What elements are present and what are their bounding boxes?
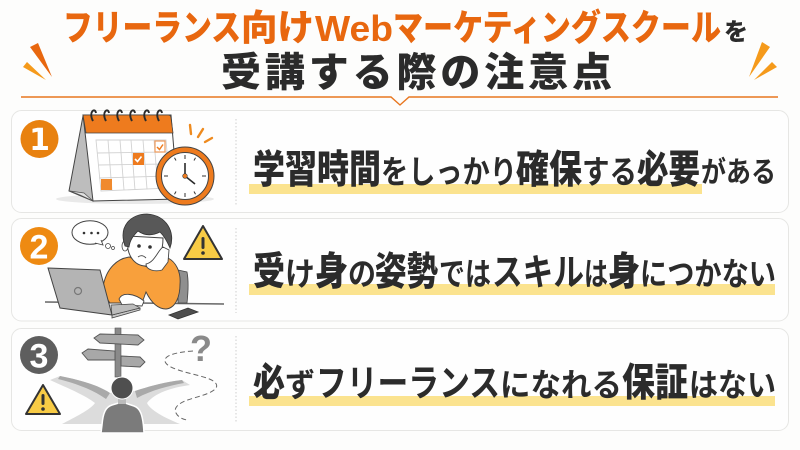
headline: point 2: 身 — [315, 241, 348, 297]
icon: signpost — [82, 328, 145, 377]
illustration: person at laptop — [45, 214, 224, 309]
headline: point 3: になれる — [500, 360, 622, 406]
headline: point 3: 必 — [253, 352, 285, 408]
headline: point 3: ず — [285, 360, 315, 406]
panel: point 1 — [12, 110, 788, 212]
headline: point 1: をしっかり — [381, 147, 517, 193]
highlight 1 — [249, 184, 702, 194]
headline: point 2: は — [584, 249, 608, 295]
icon: question mark and dashed path: ? — [190, 328, 212, 369]
icon: left burst — [23, 43, 52, 80]
panel: point 2 — [12, 214, 788, 321]
highlight 3 — [249, 396, 775, 406]
header rule with notch — [21, 97, 778, 105]
title: マーケティングスクール — [393, 0, 721, 51]
headline: point 1 — [253, 139, 776, 195]
subtitle: 受講する際の注意点 — [221, 40, 612, 98]
number badge 3 — [20, 336, 58, 376]
title: 向け — [241, 0, 314, 51]
headline: point 2: では — [439, 249, 491, 295]
illustration: person from behind — [101, 377, 144, 433]
headline: point 2: 身 — [608, 241, 640, 297]
headline: point 3 — [253, 352, 776, 408]
headline: point 2: け — [285, 249, 315, 295]
number badge 1 — [20, 120, 58, 158]
icon: speech bubble — [72, 221, 114, 250]
headline: point 3: はない — [689, 360, 776, 406]
headline: point 1: 学習時間 — [253, 139, 381, 195]
number badge 1: 1 — [29, 123, 50, 158]
headline: point 1: がある — [701, 149, 776, 191]
icon: right burst — [749, 42, 777, 80]
icon: warning — [184, 226, 222, 259]
headline: point 3: 保証 — [622, 352, 688, 408]
title: を — [724, 12, 748, 47]
headline: point 2: につかない — [640, 249, 776, 295]
number badge 2: 2 — [30, 228, 48, 266]
icon: calendar — [56, 110, 214, 204]
icon: warning — [26, 385, 60, 414]
title — [63, 0, 748, 51]
headline: point 1: 確保 — [516, 139, 582, 195]
number badge 2 — [20, 227, 58, 266]
headline: point 2: スキル — [492, 242, 584, 296]
icon: phone — [169, 308, 198, 319]
highlight 2 — [249, 284, 775, 295]
headline: point 3: フリーランス — [316, 353, 500, 407]
icon: laptop — [48, 268, 140, 318]
icon: question mark and dashed path — [165, 328, 217, 420]
headline: point 2: 受 — [253, 241, 285, 297]
headline: point 2: 姿勢 — [375, 241, 438, 297]
headline: point 1: する — [582, 147, 637, 193]
icon: clock — [156, 125, 214, 205]
title: Web — [315, 8, 393, 49]
number badge 3: 3 — [30, 338, 48, 376]
headline: point 2 — [253, 241, 776, 297]
panel: point 3 — [12, 328, 788, 433]
headline: point 2: の — [348, 249, 376, 295]
title: フリーランス — [63, 0, 241, 51]
headline: point 1: 必要 — [637, 139, 700, 195]
illustration: forked road — [50, 376, 190, 424]
